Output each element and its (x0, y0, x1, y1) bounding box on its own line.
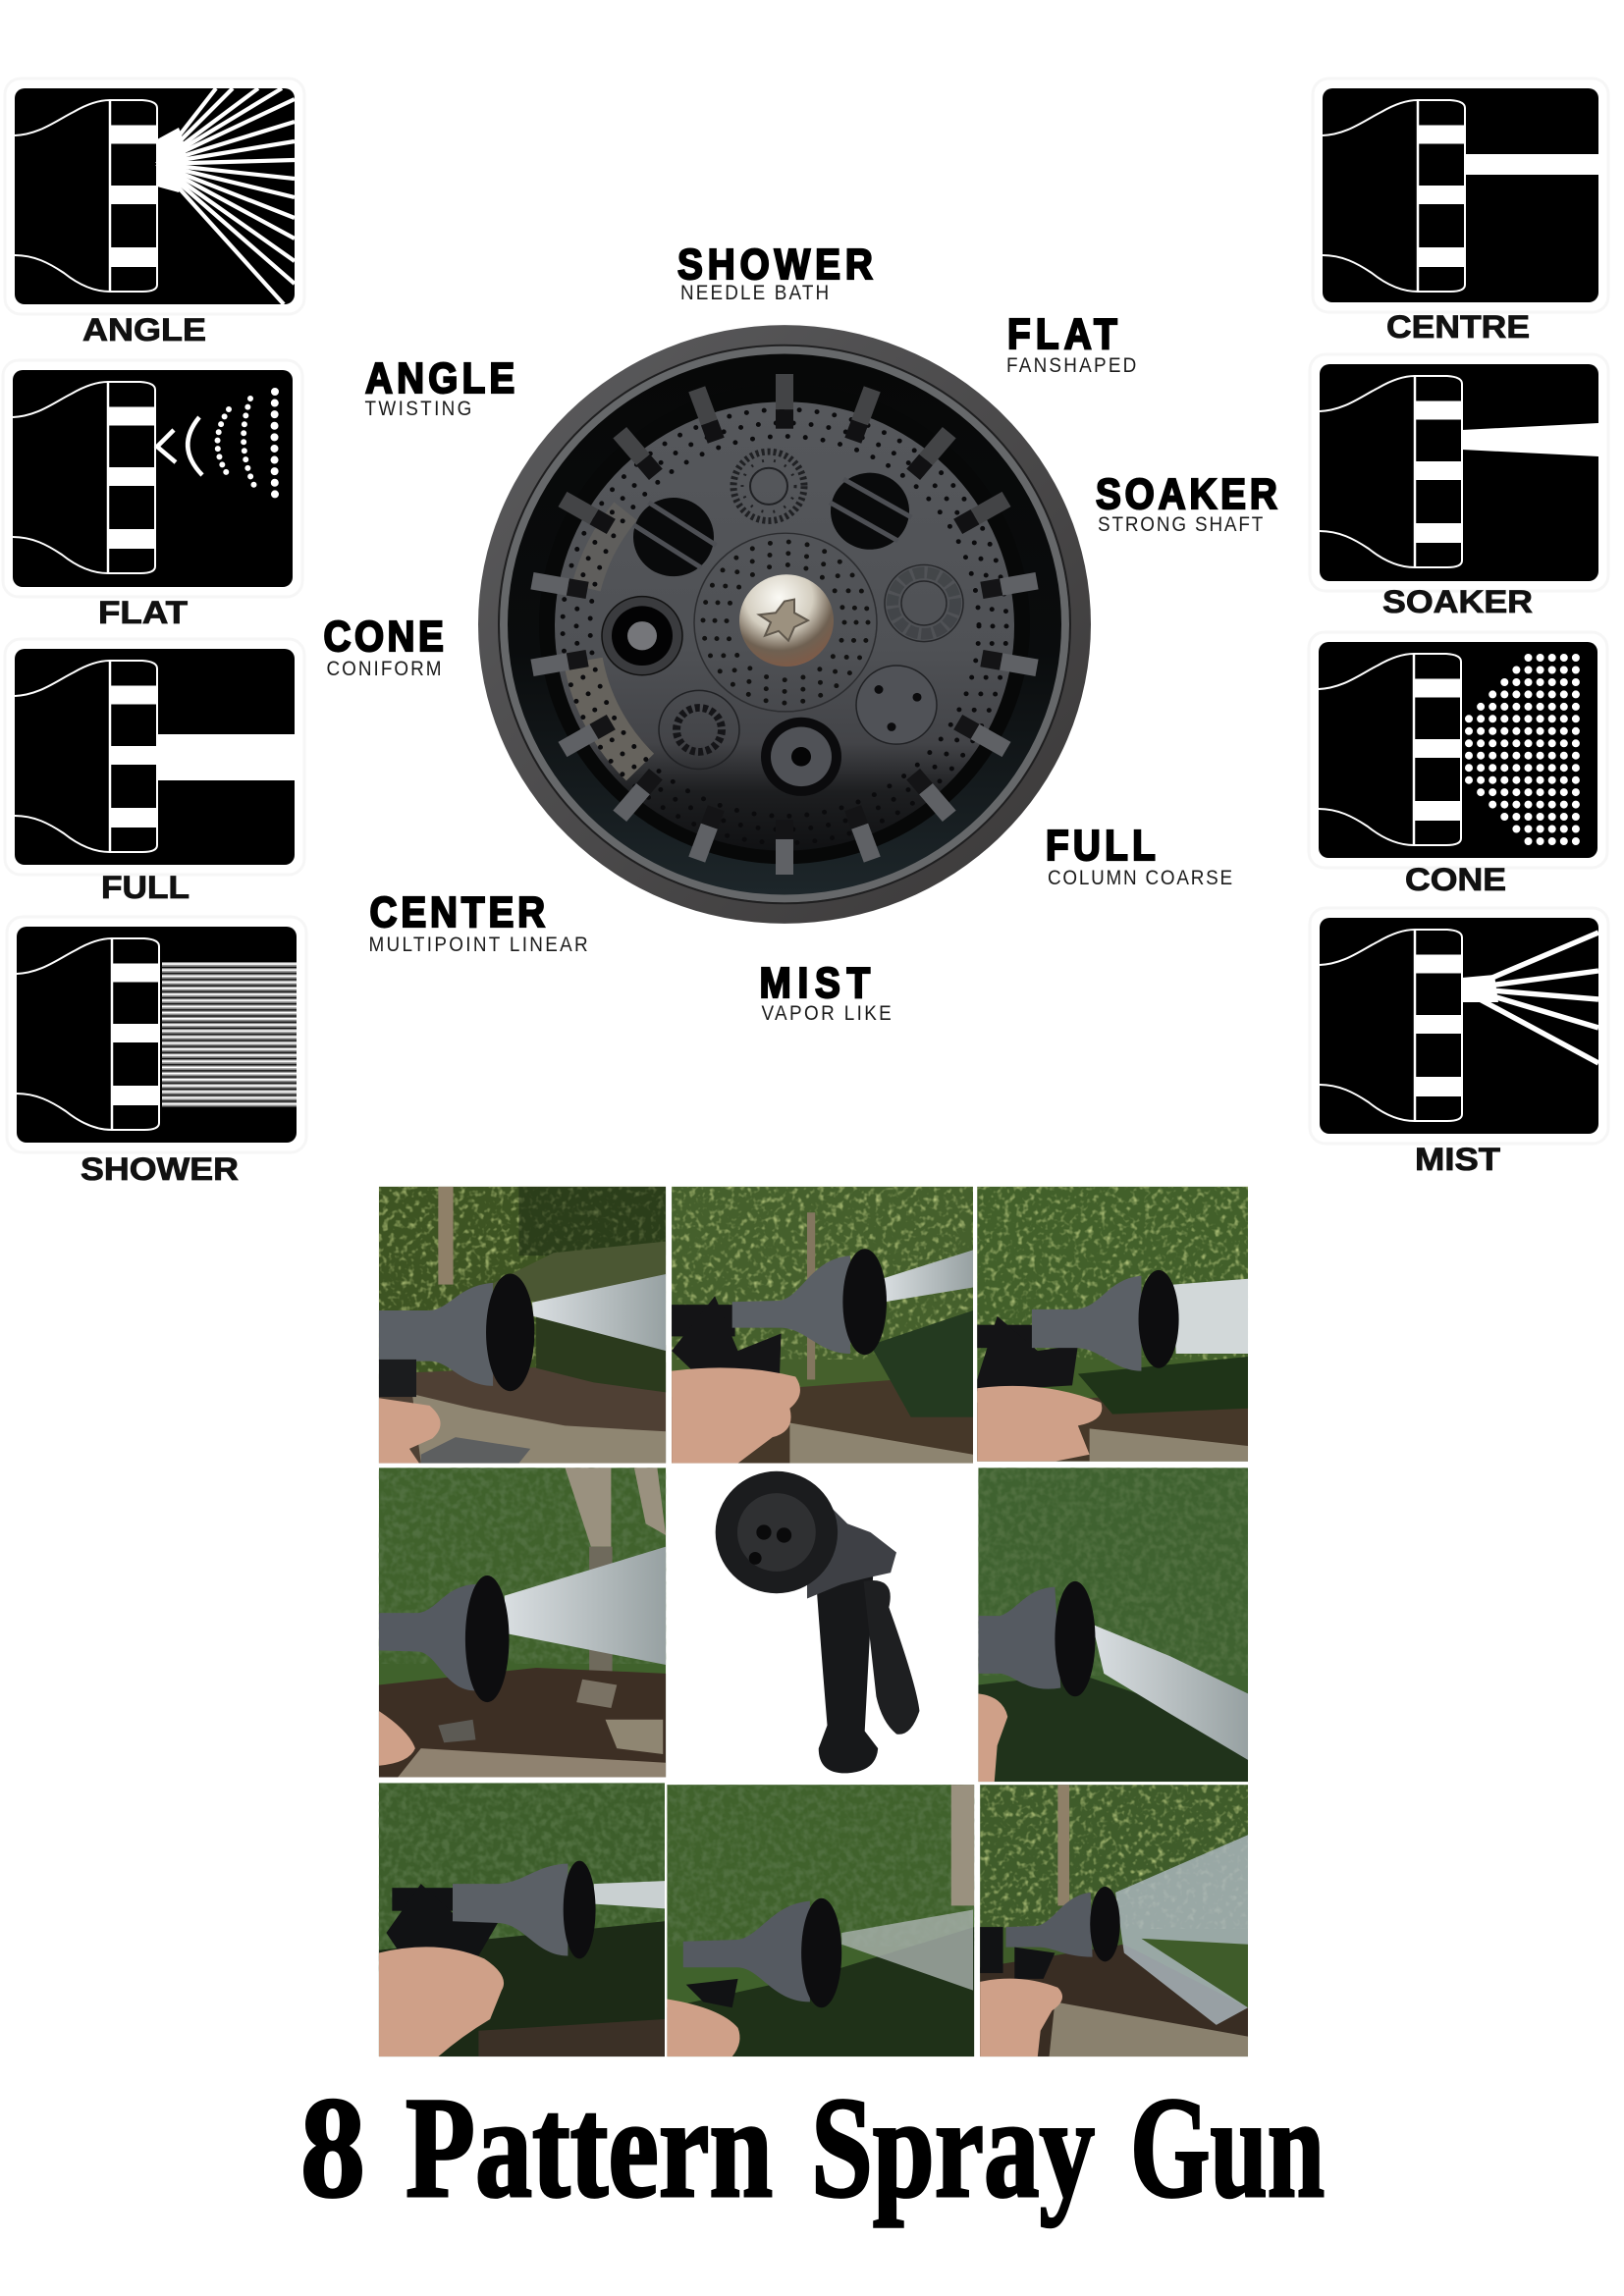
panel: shower pattern icon (7, 917, 306, 1187)
pattern: left slotted (618, 483, 730, 592)
pattern: grommet (602, 597, 682, 675)
icon: flat spray (3, 360, 302, 597)
photo: spray top middle (672, 1186, 974, 1464)
pattern: single jet (761, 718, 841, 796)
label: mist: MIST (1415, 1142, 1501, 1177)
label: full column coarse: COLUMN COARSE (1048, 867, 1232, 889)
icon: angle spray (5, 79, 304, 314)
label: full: FULL (101, 870, 189, 905)
label: angle twisting: TWISTING (365, 398, 471, 420)
pattern: gear (733, 452, 804, 520)
title: 8 (300, 2067, 365, 2227)
photo: product centre (715, 1470, 919, 1773)
label: center multipoint linear: MULTIPOINT LINEAR (369, 934, 588, 956)
screw (739, 574, 834, 667)
label: cone coniform: CONE (324, 612, 444, 661)
label: center multipoint linear (369, 887, 588, 956)
title (300, 2067, 1325, 2227)
label: soaker strong shaft: STRONG SHAFT (1098, 513, 1263, 536)
label: soaker strong shaft: SOAKER (1096, 469, 1277, 518)
pattern: three holes (856, 666, 937, 744)
label: shower needle bath: SHOWER (677, 240, 873, 289)
panel: mist pattern icon (1310, 908, 1608, 1177)
panel: full pattern icon (5, 639, 304, 905)
label: center multipoint linear: CENTER (369, 887, 545, 936)
photo: spray bottom right (980, 1785, 1249, 2057)
nozzle face photo (478, 325, 1091, 924)
photo: spray bottom middle (667, 1785, 974, 2057)
pattern: studded rosette (659, 690, 739, 770)
tabs (530, 374, 1039, 875)
photo: spray middle right (978, 1468, 1249, 1783)
label: flat fanshaped: FLAT (1007, 309, 1117, 358)
icon: shower spray (7, 917, 306, 1152)
panel: soaker pattern icon (1310, 354, 1608, 619)
label: flat fanshaped (1006, 309, 1136, 377)
photo grid (379, 1187, 1248, 2056)
label: shower: SHOWER (81, 1151, 239, 1187)
pattern: segmented ring (885, 564, 963, 642)
label: mist vapor like: MIST (760, 958, 870, 1007)
label: cone coniform: CONIFORM (326, 658, 442, 680)
label: flat fanshaped: FANSHAPED (1006, 354, 1136, 377)
label: full column coarse (1046, 821, 1232, 889)
panel: cone pattern icon (1309, 632, 1607, 897)
label: cone: CONE (1405, 862, 1506, 897)
label: full column coarse: FULL (1046, 821, 1156, 870)
title: Pattern (406, 2067, 773, 2227)
label: mist vapor like: VAPOR LIKE (762, 1002, 892, 1025)
icon: full spray (5, 639, 304, 875)
photo: spray bottom left (379, 1783, 665, 2057)
central perforated disc (694, 533, 877, 712)
icon: cone spray (1309, 632, 1607, 868)
photo: spray top right (977, 1186, 1249, 1462)
label: angle twisting: ANGLE (365, 353, 514, 402)
label: centre: CENTRE (1386, 309, 1530, 345)
label: angle: ANGLE (82, 312, 206, 347)
panel: angle pattern icon (5, 79, 304, 347)
panel: centre pattern icon (1313, 79, 1608, 345)
icon: mist spray (1310, 908, 1608, 1144)
panel: flat pattern icon (3, 360, 302, 630)
photo: spray middle left (379, 1468, 666, 1777)
photo: spray top left (379, 1186, 666, 1464)
label: mist vapor like (760, 958, 892, 1025)
label: shower needle bath: NEEDLE BATH (680, 282, 829, 304)
icon: soaker spray (1310, 354, 1608, 591)
icon: centre spray (1313, 79, 1608, 312)
label: soaker: SOAKER (1382, 584, 1533, 619)
title: Spray (811, 2067, 1095, 2227)
title: Gun (1130, 2067, 1325, 2227)
pattern: right slotted (816, 458, 924, 563)
label: flat: FLAT (98, 595, 189, 630)
